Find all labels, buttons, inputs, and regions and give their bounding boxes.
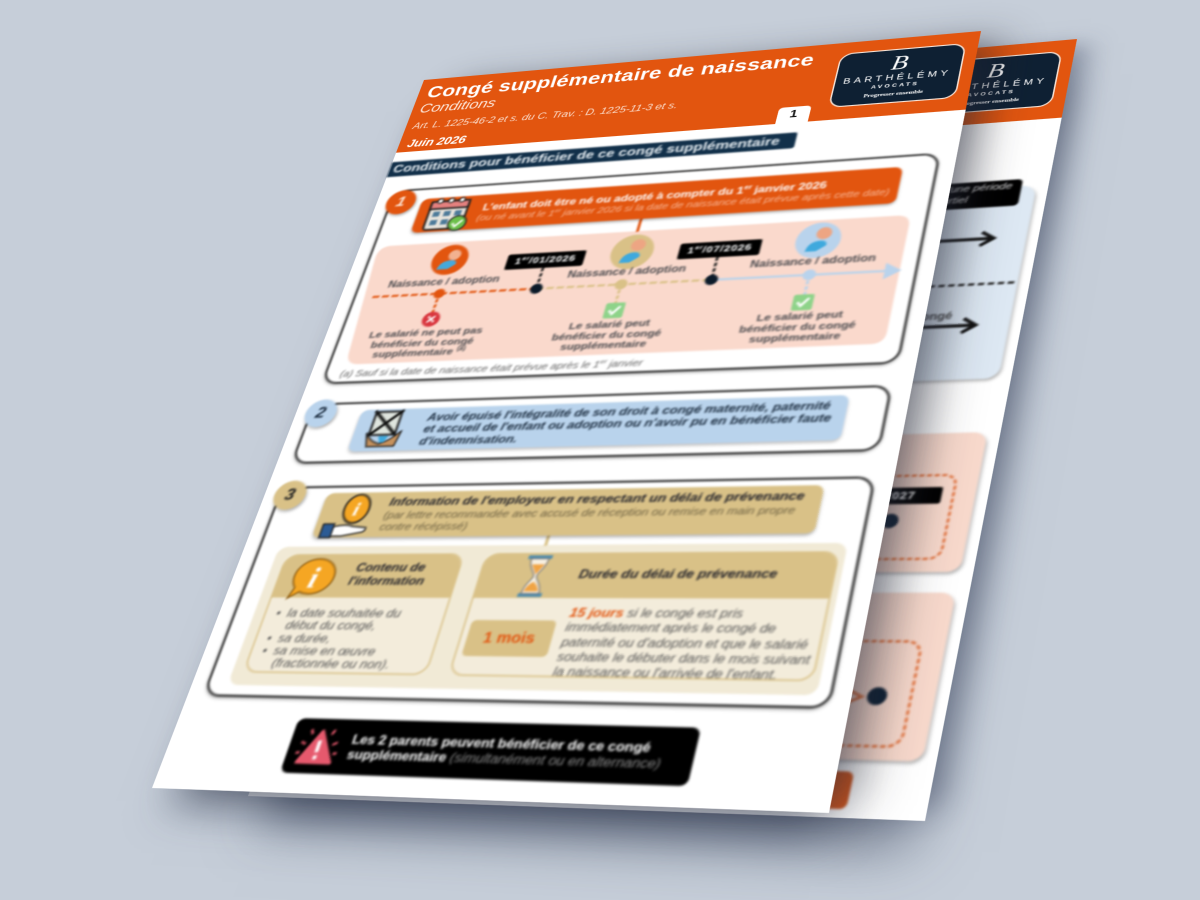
outcome text middle: Le salarié peut xyxy=(567,318,651,332)
subtitle: Conditions xyxy=(418,96,498,116)
dashed frame B xyxy=(537,638,924,748)
orange chevron xyxy=(850,689,866,704)
label: birth right: Naissance / adoption xyxy=(749,253,877,270)
label: birth middle: Naissance / adoption xyxy=(566,264,687,280)
icon: baby orange xyxy=(427,244,473,276)
blue banner text xyxy=(418,399,833,447)
logo: B xyxy=(889,51,911,74)
icon: baby blue xyxy=(791,221,845,259)
back page logo: Progresser ensemble xyxy=(959,96,1020,107)
tan banner title: Information de l'employeur en respectant un délai de prévenance xyxy=(388,489,806,508)
badge 3 xyxy=(269,480,311,510)
blue banner text: et accueil de l'enfant ou adoption ou n'avoir pu en bénéficier faute xyxy=(422,411,833,435)
black note tag: partiel xyxy=(935,195,969,207)
callout text xyxy=(345,732,662,772)
bullet list: (fractionnée ou non). xyxy=(269,656,392,672)
outcome text left xyxy=(367,325,484,360)
outcome text right: bénéficier du congé xyxy=(738,319,857,335)
outcome text right: supplémentaire xyxy=(748,330,842,345)
icon: info bubble xyxy=(284,556,338,601)
dashed divider xyxy=(823,281,1015,293)
icon: alert triangle xyxy=(292,728,340,766)
back page blurred content xyxy=(830,178,1038,811)
back page logo: BARTHÉLÉMY xyxy=(938,77,1048,94)
arrow one xyxy=(940,230,998,248)
back page logo xyxy=(924,51,1063,116)
icon: hourglass xyxy=(516,554,554,598)
logo: AVOCATS xyxy=(870,80,920,90)
outcome text middle: bénéficier du congé xyxy=(550,327,663,343)
badge 1 xyxy=(382,189,420,215)
tan banner note: (par lettre recommandée avec accusé de réception ou remise en main propre xyxy=(382,504,797,521)
panel: peach block A xyxy=(362,432,988,574)
card heading: Contenu de xyxy=(354,561,427,574)
bullet list: • sa mise en œuvre xyxy=(260,643,378,659)
label: birth left: Naissance / adoption xyxy=(386,274,501,290)
outcome text right: Le salarié peut xyxy=(755,309,844,324)
blue banner text: Avoir épuisé l'intégralité de son droit à congé maternité, paternité xyxy=(426,399,832,423)
tan banner xyxy=(311,485,825,538)
panel: condition 2 xyxy=(290,385,893,464)
blue banner xyxy=(347,395,850,452)
icon: info on hand xyxy=(316,492,373,540)
panel: blue timeline panel xyxy=(428,185,1037,398)
dashed frame A xyxy=(592,474,959,562)
timeline axis xyxy=(365,247,904,316)
front page xyxy=(152,31,981,813)
back page logo: B xyxy=(985,59,1007,82)
timeline dots xyxy=(432,269,817,299)
black note tag: d'une période xyxy=(941,181,1013,196)
icon: green check middle xyxy=(602,302,626,319)
outcome text left: bénéficier du congé xyxy=(369,335,475,350)
date: Juin 2026 xyxy=(405,134,468,150)
outcome text left: Le salarié ne peut pas xyxy=(367,325,484,340)
panel: peach block B xyxy=(298,593,956,762)
arrow two xyxy=(923,316,980,335)
badge 3: 3 xyxy=(282,486,298,504)
outcome text middle: supplémentaire xyxy=(559,338,648,353)
header band xyxy=(396,31,981,153)
card header xyxy=(471,550,846,599)
section heading bar: Conditions pour bénéficier de ce congé supplémentaire xyxy=(391,135,781,175)
duration text: souhaite le débuter dans le mois suivant xyxy=(555,650,812,667)
outcome text right xyxy=(738,309,857,345)
timeline dot A xyxy=(880,514,900,528)
date tag xyxy=(816,487,943,505)
logo xyxy=(828,43,967,108)
outcome text middle xyxy=(550,318,663,353)
black note tag xyxy=(696,179,1023,225)
outcome text left: supplémentaire (a) xyxy=(371,345,467,360)
bullet list: • sa durée, xyxy=(265,631,333,645)
label: congé: congé xyxy=(913,311,954,323)
card heading xyxy=(346,561,427,587)
banner text line 2: (ou né avant le 1er janvier 2026 si la date de naissance était prévue après cette date) xyxy=(475,187,891,223)
card: information content xyxy=(243,553,465,675)
duration text xyxy=(551,606,812,681)
duration text: immédiatement après le congé de xyxy=(564,621,778,636)
date tag 2: 1er/07/2026 xyxy=(686,242,753,256)
badge 2: 2 xyxy=(313,404,329,422)
tan banner note xyxy=(378,504,797,533)
callout text: supplémentaire (simultanément ou en alternance) xyxy=(345,748,662,772)
duration chip xyxy=(461,620,557,657)
card: notice period xyxy=(448,551,840,681)
icon: crossed calendar in hands xyxy=(364,408,407,449)
panel: condition 1 xyxy=(321,153,941,384)
connector xyxy=(636,218,643,232)
duration text: 15 jours si le congé est pris xyxy=(568,606,745,621)
page number tab xyxy=(775,105,812,124)
peach timeline panel xyxy=(347,215,910,365)
legal reference: Art. L. 1225-46-2 et s. du C. Trav. : D. 1225-11-3 et s. xyxy=(411,100,679,131)
timeline dot B xyxy=(865,687,889,705)
bullet list xyxy=(260,606,403,672)
footnote: (a) Sauf si la date de naissance était prévue après le 1er janvier xyxy=(338,358,644,379)
date tag 1 xyxy=(504,250,587,270)
panel: condition 3 xyxy=(202,476,876,709)
callout: both parents xyxy=(280,718,701,786)
icon: info on hand: i xyxy=(350,500,363,520)
page number tab: 1 xyxy=(788,108,799,120)
callout text: Les 2 parents peuvent bénéficier de ce congé xyxy=(350,733,652,755)
date tag: 1er/03/2027 xyxy=(842,490,917,503)
connector xyxy=(544,534,551,546)
duration chip: 1 mois xyxy=(481,630,537,647)
date tag 1: 1er/01/2026 xyxy=(513,253,577,267)
card heading: l'information xyxy=(346,574,426,587)
logo: Progresser ensemble xyxy=(863,88,924,99)
back page header band xyxy=(492,39,1077,161)
bullet list: début du congé, xyxy=(283,618,378,633)
banner text line 1: L'enfant doit être né ou adopté à compter du 1er janvier 2026 xyxy=(481,179,828,213)
date tag 2 xyxy=(677,239,763,259)
icon: calendar xyxy=(420,196,473,232)
timeline xyxy=(370,222,902,328)
tan banner note: contre récépissé) xyxy=(378,520,469,533)
orange button xyxy=(486,761,854,809)
duration text: paternité ou d'adoption et que le salarié xyxy=(560,635,809,652)
icon: red cross xyxy=(420,311,442,327)
badge 1: 1 xyxy=(394,194,408,210)
title: Congé supplémentaire de naissance xyxy=(424,50,817,102)
back page logo: AVOCATS xyxy=(966,88,1016,98)
card header xyxy=(270,553,471,598)
orange banner xyxy=(410,167,903,233)
icon: baby tan xyxy=(606,233,659,270)
icon: green check right xyxy=(791,294,815,311)
card heading: Durée du délai de prévenance xyxy=(577,567,779,581)
bullet list: • la date souhaitée du xyxy=(274,606,403,620)
badge 2 xyxy=(300,399,341,428)
back page xyxy=(248,39,1077,821)
logo: BARTHÉLÉMY xyxy=(842,69,952,86)
icon: info bubble: i xyxy=(303,562,324,595)
cream panel xyxy=(227,543,848,695)
blue banner text: d'indemnisation. xyxy=(418,432,519,447)
blurred body content xyxy=(204,131,941,788)
